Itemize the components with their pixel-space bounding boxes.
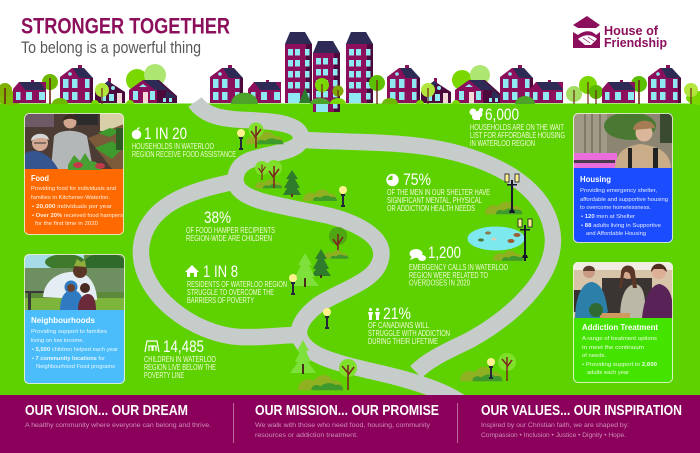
stat: 38% children: OF FOOD HAMPER RECIPIENTS xyxy=(186,226,275,235)
stat: 21% addiction: 21% xyxy=(383,304,411,323)
panel: food: families in Kitchener-Waterloo. xyxy=(31,195,110,201)
apartment towers xyxy=(285,32,373,112)
footer: vision: OUR VISION... OUR DREAM xyxy=(25,403,188,419)
icon: swing set xyxy=(145,341,159,352)
stat: 14,485 children: REGION LIVE BELOW THE xyxy=(144,363,216,372)
stat: 14,485 children: CHILDREN IN WATERLOO xyxy=(144,355,216,364)
panel: housing: Housing xyxy=(580,174,611,184)
icon: squirrel xyxy=(470,108,483,120)
panel: food: for the first time in 2020 xyxy=(35,221,99,227)
panel: food: Food xyxy=(31,173,49,183)
stat: 1 in 8 poverty: BARRIERS OF POVERTY xyxy=(187,296,254,305)
footer: vision: A healthy community where everyone can belong and thrive. xyxy=(25,422,211,429)
logo: House of Friendship: House of xyxy=(604,24,659,38)
stat: 1,200 emergency calls: EMERGENCY CALLS IN WATERLOO xyxy=(409,263,508,272)
panel: neighbourhoods: Providing support to families xyxy=(31,329,107,335)
houses right of road xyxy=(210,65,281,103)
footer: vision xyxy=(25,403,211,429)
panel: housing xyxy=(573,112,673,243)
skyline: foreground trees and bushes xyxy=(52,75,698,104)
panel: housing: to overcome homelessness. xyxy=(580,205,651,211)
stat: 1,200 emergency calls: REGION WERE RELATED TO xyxy=(409,271,488,280)
photo: three people on a couch xyxy=(573,262,673,318)
road network xyxy=(141,102,553,402)
title: STRONGER TOGETHER xyxy=(21,14,230,38)
stat: 6,000 waitlist: LIST FOR AFFORDABLE HOUSING xyxy=(470,131,565,140)
stat: 21% addiction: DURING THEIR LIFETIME xyxy=(368,337,438,346)
stat: 1 in 20 food assistance: REGION RECEIVE FOOD ASSISTANCE xyxy=(132,150,236,159)
panel: addiction treatment xyxy=(573,262,673,383)
icon: speech bubbles xyxy=(410,249,426,261)
panel: neighbourhoods: • 5,500 children helped each year xyxy=(32,347,118,353)
stat: 75% shelter men xyxy=(386,170,490,213)
park ground xyxy=(0,102,700,402)
panel: addiction treatment: adults each year xyxy=(587,370,629,376)
skyline: trees behind houses xyxy=(0,64,700,105)
photo: man in cap xyxy=(573,112,673,168)
photo: family in a park xyxy=(24,253,127,310)
stat: 6,000 waitlist: 6,000 xyxy=(485,105,519,124)
panel: housing: • 88 adults living in Supportive xyxy=(581,223,662,229)
panel: neighbourhoods: • 7 community locations for xyxy=(32,356,105,362)
panel: housing: • 120 men at Shelter xyxy=(581,214,635,220)
stat: 21% addiction xyxy=(368,304,450,346)
panel: housing: Providing emergency shelter, xyxy=(580,188,657,194)
park scenery: trees, firs, lamps, bushes xyxy=(237,122,522,390)
stat: 1 in 8 poverty: STRUGGLE TO OVERCOME THE xyxy=(187,288,274,297)
panel: addiction treatment: of needs. xyxy=(582,353,606,359)
stat: 14,485 children: 14,485 xyxy=(163,337,204,356)
stat: 1,200 emergency calls: 1,200 xyxy=(428,243,461,262)
panel: addiction treatment: Addiction Treatment xyxy=(582,322,658,332)
footer band xyxy=(0,395,700,453)
pond with ducks xyxy=(468,219,532,261)
stat: 75% shelter men: SIGNIFICANT MENTAL, PHYSICAL xyxy=(387,196,482,205)
footer: mission: OUR MISSION... OUR PROMISE xyxy=(255,403,439,419)
panel: addiction treatment: to meet the continuum xyxy=(582,345,644,351)
subtitle: To belong is a powerful thing xyxy=(21,38,201,57)
stat: 1 in 8 poverty: RESIDENTS OF WATERLOO REGION xyxy=(187,280,287,289)
footer: mission: resources or addiction treatment. xyxy=(255,432,358,439)
stat: 38% children xyxy=(186,208,275,243)
logo: House of Friendship: Friendship xyxy=(604,36,667,50)
panel: neighbourhoods: Neighbourhoods xyxy=(31,315,95,325)
stat: 38% children: 38% xyxy=(204,208,231,227)
stat: 6,000 waitlist: HOUSEHOLDS ARE ON THE WAIT xyxy=(470,123,564,132)
stat: 1,200 emergency calls xyxy=(409,243,508,288)
icon: pie xyxy=(386,174,399,186)
photo: food bank volunteers xyxy=(24,113,124,170)
stat: 1 in 20 food assistance: 1 IN 20 xyxy=(144,124,187,143)
stat: 21% addiction: STRUGGLE WITH ADDICTION xyxy=(368,329,450,338)
stat: 1,200 emergency calls: OVERDOSES IN 2020 xyxy=(409,278,470,288)
stat: 6,000 waitlist: IN WATERLOO REGION xyxy=(470,139,535,148)
panel: neighbourhoods xyxy=(24,253,127,384)
footer: values: Compassion • Inclusion • Justice • Dignity • Hope. xyxy=(481,432,626,439)
stat: 75% shelter men: OF THE MEN IN OUR SHELTER HAVE xyxy=(387,188,490,197)
stat: 1 in 8 poverty xyxy=(185,262,287,305)
stat: 14,485 children xyxy=(144,337,216,380)
icon: apple xyxy=(132,128,141,139)
footer: values: Inspired by our Christian faith, we are shaped by: xyxy=(481,422,629,429)
logo: House of Friendship xyxy=(573,16,667,50)
panel: food: • Over 20% received food hampers xyxy=(32,213,123,219)
panel: addiction treatment: A range of treatment options xyxy=(582,336,657,342)
footer: mission: We walk with those who need food, housing, community xyxy=(255,422,431,429)
panel: addiction treatment: • Providing support to 2,600 xyxy=(582,362,658,368)
footer: mission xyxy=(255,403,439,439)
stat: 38% children: REGION-WIDE ARE CHILDREN xyxy=(186,234,272,243)
houses left of road xyxy=(13,65,177,103)
stat: 75% shelter men: 75% xyxy=(403,170,431,189)
icon: people xyxy=(368,308,380,320)
panel: housing: affordable and supportive housing xyxy=(580,197,668,203)
icon: house xyxy=(185,265,199,277)
footer: values xyxy=(481,403,682,439)
panel: housing: and Affordable Housing xyxy=(586,231,646,237)
stat: 1 in 20 food assistance xyxy=(132,124,236,159)
panel: food xyxy=(24,113,124,235)
panel: food: • 20,000 individuals per year xyxy=(32,204,112,210)
stat: 21% addiction: OF CANADIANS WILL xyxy=(368,321,429,330)
stat: 1 in 20 food assistance: HOUSEHOLDS IN WATERLOO xyxy=(132,142,214,151)
panel: neighbourhoods: Neighbourhood Food programs xyxy=(36,364,115,370)
stat: 75% shelter men: OR ADDICTION HEALTH NEEDS xyxy=(387,204,475,213)
panel: neighbourhoods: living on low income. xyxy=(31,338,84,344)
stat: 1 in 8 poverty: 1 IN 8 xyxy=(203,262,238,281)
stat: 14,485 children: POVERTY LINE xyxy=(144,371,184,380)
panel: food: Providing food for individuals and xyxy=(31,186,116,192)
houses far right xyxy=(387,65,681,103)
stat: 6,000 waitlist xyxy=(470,105,565,148)
